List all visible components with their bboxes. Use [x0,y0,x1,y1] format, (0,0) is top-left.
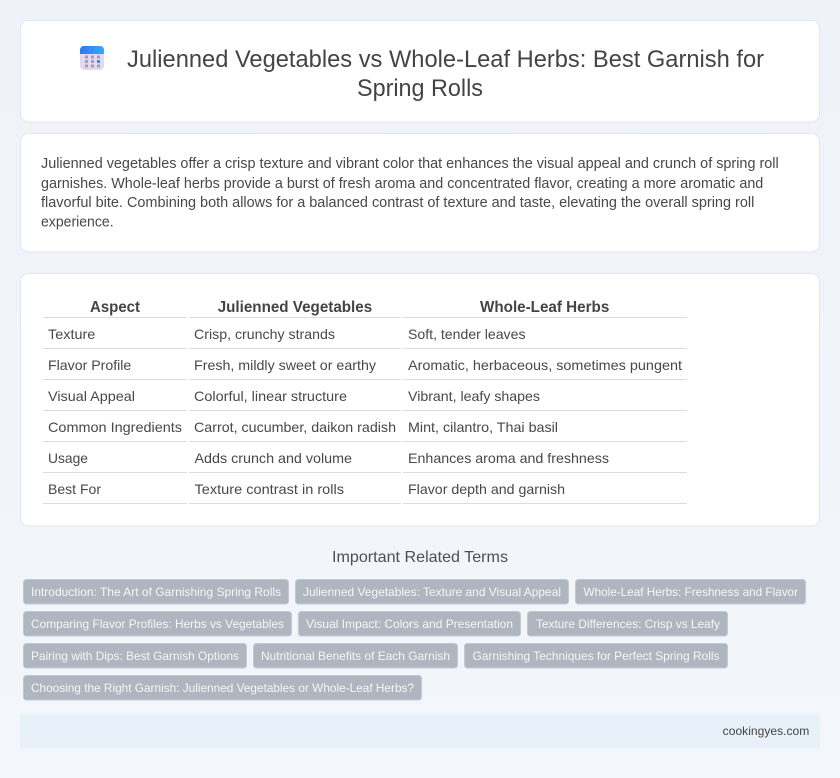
table row: best for: Texture contrast in rolls [194,481,344,497]
tag [464,644,728,668]
tag: Visual Impact: Colors and Presentation [306,617,513,631]
table row: usage [43,450,687,473]
title [127,46,764,102]
tag: Introduction: The Art of Garnishing Spring Rolls [31,585,281,599]
tag [576,580,806,604]
table row: flavor profile: Aromatic, herbaceous, sometimes pungent [408,357,682,373]
title: Julienned Vegetables vs Whole-Leaf Herbs: Best Garnish for [127,46,764,73]
table row: common ingredients: Common Ingredients [48,419,182,435]
text block: summary: Julienned vegetables offer a crisp texture and vibrant color that enhances the visual appeal and crunch of spring roll [41,156,779,172]
table row: texture [43,326,687,349]
tag [24,580,288,604]
tag [24,612,292,636]
table row: visual appeal: Colorful, linear structure [194,388,347,404]
table row: texture: Crisp, crunchy strands [194,326,335,342]
text block: summary: garnishes. Whole-leaf herbs provide a burst of fresh aroma and concentrated flavor, creating a more aromatic and [41,176,763,192]
tag: Nutritional Benefits of Each Garnish [261,649,450,663]
table row: texture: Soft, tender leaves [408,326,526,342]
table row: common ingredients [43,419,687,442]
table row: common ingredients: Mint, cilantro, Thai basil [408,419,558,435]
title: Spring Rolls [357,75,483,102]
table row: flavor profile: Fresh, mildly sweet or earthy [194,357,376,373]
table row: visual appeal: Visual Appeal [48,388,135,404]
text block: summary: flavorful bite. Combining both allows for a balanced contrast of texture and taste, elevating the overall spring roll [41,195,754,211]
table row: visual appeal: Vibrant, leafy shapes [408,388,540,404]
tag list: related terms [24,580,806,700]
tag [254,644,458,668]
panel: comparison table [20,274,820,526]
table row: usage: Enhances aroma and freshness [408,450,609,466]
tag: Julienned Vegetables: Texture and Visual Appeal [303,585,561,599]
table row: best for [43,481,687,504]
panel: summary paragraph [20,134,820,252]
tag: Garnishing Techniques for Perfect Spring Rolls [472,649,720,663]
table row: visual appeal [43,388,687,411]
text block: summary [41,156,779,230]
text block: summary: experience. [41,214,114,230]
footer [20,714,820,748]
footer source text: cookingyes.com [723,724,809,738]
table header row [43,299,687,318]
icon: calendar [80,46,104,70]
table header row: Julienned Vegetables [218,299,372,316]
tag [298,612,520,636]
table row: usage: Adds crunch and volume [194,450,352,466]
tag [24,644,246,668]
heading: important related terms: Important Related Terms [332,549,508,566]
tag: Choosing the Right Garnish: Julienned Vegetables or Whole-Leaf Herbs? [31,681,414,695]
table row: best for: Best For [48,481,101,497]
tag [24,676,422,700]
table row: flavor profile: Flavor Profile [48,357,132,373]
tag: Texture Differences: Crisp vs Leafy [536,617,720,631]
table row: usage: Usage [48,450,88,466]
tag: Whole-Leaf Herbs: Freshness and Flavor [584,585,798,599]
table row: common ingredients: Carrot, cucumber, daikon radish [194,419,396,435]
panel: header [20,20,820,122]
table header row: Aspect [90,299,140,316]
table row: best for: Flavor depth and garnish [408,481,565,497]
tag [528,612,728,636]
table row: texture: Texture [48,326,96,342]
table row: flavor profile [43,357,687,380]
tag: Comparing Flavor Profiles: Herbs vs Vegetables [31,617,284,631]
tag [296,580,568,604]
tag: Pairing with Dips: Best Garnish Options [31,649,239,663]
table header row: Whole-Leaf Herbs [480,299,609,316]
